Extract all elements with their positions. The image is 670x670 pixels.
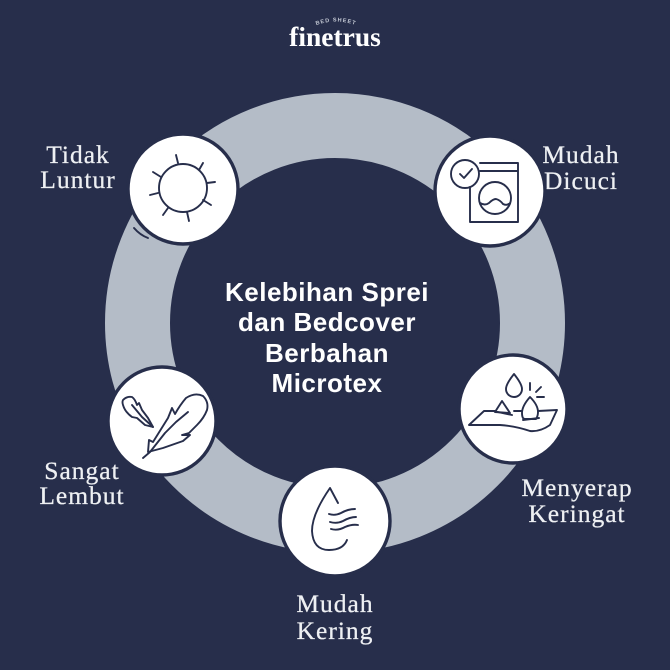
icon: sun	[128, 134, 238, 244]
title: Kelebihan Sprei	[225, 277, 429, 307]
title: Microtex	[272, 368, 382, 398]
label: sangat lembut: Lembut	[39, 481, 125, 510]
label: menyerap keringat: Menyerap	[521, 473, 633, 502]
label: menyerap keringat	[521, 473, 633, 528]
icon: feathers	[108, 367, 216, 475]
icon: washing machine	[435, 136, 545, 246]
title	[225, 277, 429, 398]
icon: absorbing cloth	[459, 355, 567, 463]
label: mudah kering: Mudah	[296, 589, 374, 618]
panel: sangat lembut	[39, 367, 216, 510]
label: mudah dicuci: Dicuci	[544, 166, 618, 195]
label: tidak luntur: Tidak	[46, 140, 110, 169]
label: mudah kering: Kering	[297, 616, 373, 645]
label: sangat lembut: Sangat	[44, 456, 120, 485]
title: dan Bedcover	[238, 307, 416, 337]
decorative mark	[134, 228, 148, 238]
panel: mudah dicuci	[435, 136, 620, 246]
icon: drop with waves	[280, 466, 390, 576]
label: tidak luntur: Luntur	[40, 165, 116, 194]
panel: menyerap keringat	[459, 355, 633, 528]
panel: mudah kering	[280, 466, 390, 645]
label: sangat lembut	[39, 456, 125, 510]
label: mudah dicuci	[542, 140, 620, 195]
label: menyerap keringat: Keringat	[528, 499, 626, 528]
label: tidak luntur	[40, 140, 116, 194]
ring	[138, 126, 532, 520]
label: mudah dicuci: Mudah	[542, 140, 620, 169]
logo: BED SHEET	[316, 18, 356, 25]
logo: finetrus	[289, 21, 381, 52]
label: mudah kering	[296, 589, 374, 645]
title: Berbahan	[265, 338, 389, 368]
panel: tidak luntur	[40, 134, 238, 244]
